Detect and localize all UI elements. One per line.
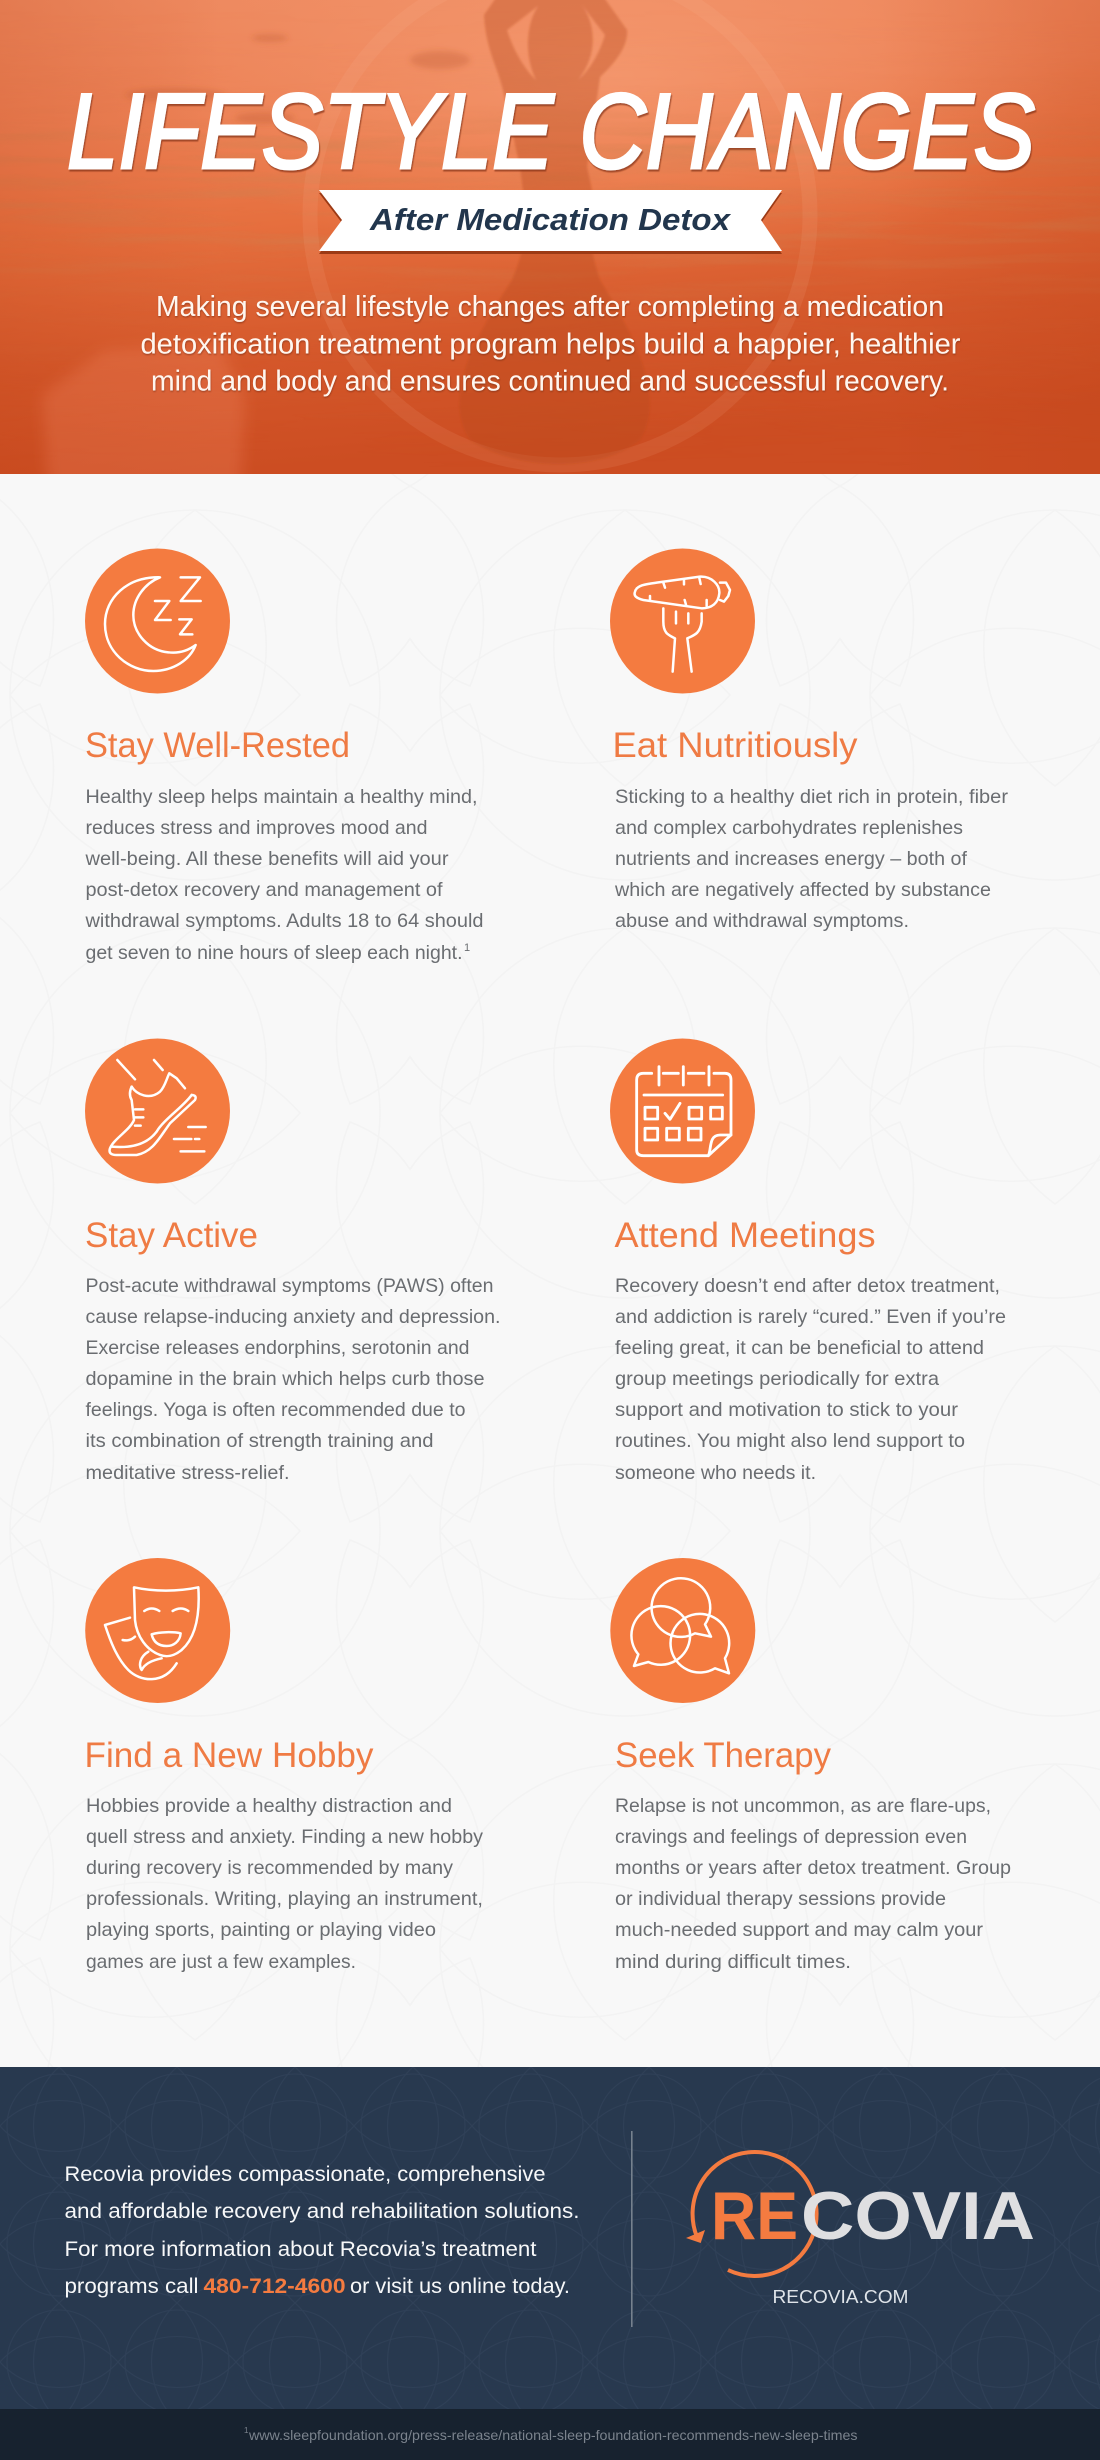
heading: Stay Well-Rested [85, 725, 350, 765]
heading: Eat Nutritiously [612, 725, 858, 765]
body text: group meetings periodically for extra [615, 1368, 939, 1390]
icon: theatre masks [85, 1558, 230, 1703]
body text: cravings and feelings of depression even [615, 1826, 967, 1848]
panel: footnote bar [0, 2409, 1100, 2460]
body text: and complex carbohydrates replenishes [615, 817, 963, 839]
body text: mind during difficult times. [615, 1951, 851, 1973]
body text: during recovery is recommended by many [86, 1857, 453, 1879]
body text: Hobbies provide a healthy distraction and [86, 1795, 452, 1817]
panel: footer [0, 2067, 1100, 2409]
body text: quell stress and anxiety. Finding a new hobby [86, 1826, 483, 1848]
body text: much-needed support and may calm your [615, 1919, 984, 1941]
heading: Stay Active [85, 1215, 258, 1255]
body text [86, 1795, 483, 1973]
panel: stay active [85, 1038, 500, 1484]
body text: someone who needs it. [615, 1462, 816, 1484]
body text: feeling great, it can be beneficial to attend [615, 1337, 984, 1359]
body text [615, 1795, 1011, 1973]
body text: feelings. Yoga is often recommended due to [86, 1399, 466, 1421]
logo: COVIA [801, 2178, 1035, 2254]
body text: playing sports, painting or playing video [86, 1919, 436, 1941]
body text: professionals. Writing, playing an instrument, [86, 1888, 483, 1910]
body text: support and motivation to stick to your [615, 1399, 959, 1421]
panel: eat nutritiously [610, 548, 1009, 932]
panel: stay well-rested [84, 548, 484, 964]
panel: footnote bar: 1 [244, 2426, 249, 2435]
body text [615, 1275, 1006, 1484]
call to action text [64, 2163, 580, 2298]
call to action text: and affordable recovery and rehabilitation solutions. [64, 2200, 580, 2223]
body text: well-being. All these benefits will aid your [84, 848, 449, 870]
logo: RE [711, 2178, 798, 2254]
call to action text: Recovia provides compassionate, comprehensive [64, 2163, 546, 2186]
icon: large ring [302, 154, 818, 472]
panel: footnote bar: www.sleepfoundation.org/press-release/national-sleep-foundation-recommends-new-sleep-times [248, 2427, 858, 2443]
call to action text: 480-712-4600 [204, 2275, 346, 2298]
body text: reduces stress and improves mood and [86, 817, 428, 839]
intro text: detoxification treatment program helps build a happier, healthier [140, 328, 961, 360]
panel: main background [0, 474, 1100, 2067]
body text: post-detox recovery and management of [86, 879, 443, 901]
heading: Seek Therapy [615, 1735, 831, 1775]
intro text [140, 291, 961, 398]
body text: Post-acute withdrawal symptoms (PAWS) often [86, 1275, 494, 1297]
call to action text: programs call [64, 2275, 198, 2298]
body text: Healthy sleep helps maintain a healthy mind, [86, 786, 478, 808]
body text [614, 786, 1009, 932]
body text [84, 786, 484, 964]
panel: attend meetings [610, 1038, 1006, 1484]
logo: RECOVIA.COM [772, 2286, 908, 2307]
body text: meditative stress-relief. [86, 1462, 290, 1484]
body text: Sticking to a healthy diet rich in protein, fiber [615, 786, 1009, 808]
panel: header background [0, 0, 1100, 490]
body text [86, 1275, 500, 1484]
body text: dopamine in the brain which helps curb those [86, 1368, 484, 1390]
panel: seek therapy [610, 1558, 1011, 1973]
subtitle: After Medication Detox [369, 202, 732, 237]
icon: carrot on fork [610, 548, 755, 694]
icon: running shoe [85, 1038, 230, 1184]
body text: Relapse is not uncommon, as are flare-ups, [615, 1795, 991, 1817]
call to action text: For more information about Recovia’s treatment [64, 2238, 537, 2261]
body text: and addiction is rarely “cured.” Even if you’re [615, 1306, 1006, 1328]
body text: games are just a few examples. [86, 1951, 356, 1973]
icon: speech bubbles [610, 1558, 755, 1703]
body text: which are negatively affected by substance [614, 879, 991, 901]
body text: 1 [464, 942, 470, 954]
body text: or individual therapy sessions provide [615, 1888, 946, 1910]
body text: its combination of strength training and [86, 1430, 434, 1452]
body text: Exercise releases endorphins, serotonin and [86, 1337, 470, 1359]
body text: cause relapse-inducing anxiety and depression. [86, 1306, 500, 1328]
icon: moon and zzz [85, 548, 230, 694]
ribbon banner [319, 190, 782, 254]
body text: withdrawal symptoms. Adults 18 to 64 should [84, 910, 483, 932]
body text: nutrients and increases energy – both of [615, 848, 968, 870]
icon: calendar [610, 1038, 755, 1184]
heading: Find a New Hobby [84, 1735, 374, 1775]
call to action text: or visit us online today. [350, 2275, 570, 2298]
body text: get seven to nine hours of sleep each night. [86, 942, 462, 964]
body text: abuse and withdrawal symptoms. [615, 910, 909, 932]
icon: lens flare [42, 346, 244, 474]
body text: months or years after detox treatment. Group [615, 1857, 1011, 1879]
heading: Attend Meetings [614, 1215, 876, 1255]
body text: Recovery doesn’t end after detox treatment, [615, 1275, 1000, 1297]
panel: find a new hobby [84, 1558, 483, 1973]
intro text: mind and body and ensures continued and successful recovery. [151, 366, 949, 398]
icon: yoga silhouette [459, 0, 650, 464]
body text: routines. You might also lend support to [615, 1430, 965, 1452]
intro text: Making several lifestyle changes after completing a medication [156, 291, 944, 323]
logo [686, 2152, 1035, 2307]
